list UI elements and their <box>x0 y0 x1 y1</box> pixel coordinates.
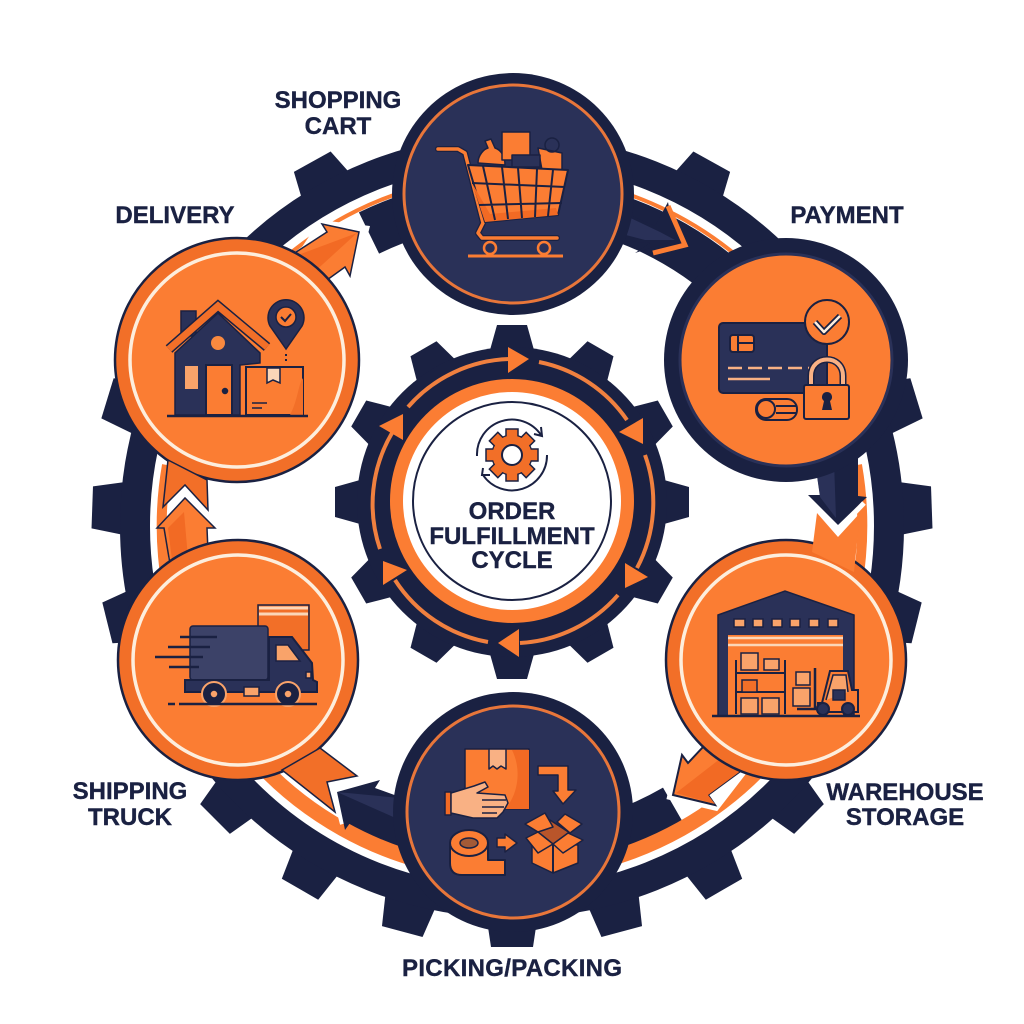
icon: shopping cart <box>438 132 568 256</box>
label: shipping truck: TRUCK <box>88 804 173 831</box>
node: shopping cart <box>392 73 634 315</box>
arrow: delivery to cart <box>290 220 370 290</box>
label: delivery: DELIVERY <box>115 202 235 229</box>
label: picking/packing: PICKING/PACKING <box>402 955 622 982</box>
title: FULFILLMENT <box>429 523 595 550</box>
node: picking and packing <box>393 692 633 932</box>
label: warehouse storage: STORAGE <box>846 804 964 831</box>
icon: gear with cycle arrows <box>477 420 547 490</box>
icon: warehouse and forklift <box>712 591 860 716</box>
label: payment: PAYMENT <box>790 202 904 229</box>
label: shopping cart <box>275 87 401 140</box>
arrow: truck to delivery <box>157 491 215 564</box>
center gear <box>335 325 689 679</box>
title: CYCLE <box>471 547 553 574</box>
arrow: warehouse to picking <box>673 747 742 805</box>
arrow: shopping cart to payment <box>612 202 685 253</box>
arrow: payment to warehouse <box>808 458 867 530</box>
icon: house with parcel and pin <box>167 300 308 416</box>
label: shopping cart: CART <box>305 113 372 140</box>
arrow tail: delivery <box>163 460 208 510</box>
label: shipping truck <box>73 778 187 831</box>
label: warehouse storage: WAREHOUSE <box>826 779 984 806</box>
label: shipping truck: SHIPPING <box>73 778 187 805</box>
arrow tail: warehouse <box>812 513 860 572</box>
node: shipping truck <box>118 540 358 812</box>
circular arrows around center <box>373 347 653 657</box>
icon: delivery truck <box>155 605 317 706</box>
label: shopping cart: SHOPPING <box>275 87 401 114</box>
icon: box, hand, tape, open carton <box>445 749 583 875</box>
label: warehouse storage <box>826 779 984 831</box>
title <box>429 498 595 574</box>
outer gear <box>91 149 933 947</box>
title: ORDER <box>469 498 555 525</box>
arrow: picking to shipping truck <box>333 779 400 846</box>
icon: credit card and lock <box>719 300 849 420</box>
arrow tail: shipping truck <box>282 748 357 812</box>
node: warehouse storage <box>666 513 906 780</box>
node: payment <box>664 238 908 482</box>
node: delivery <box>115 238 359 510</box>
